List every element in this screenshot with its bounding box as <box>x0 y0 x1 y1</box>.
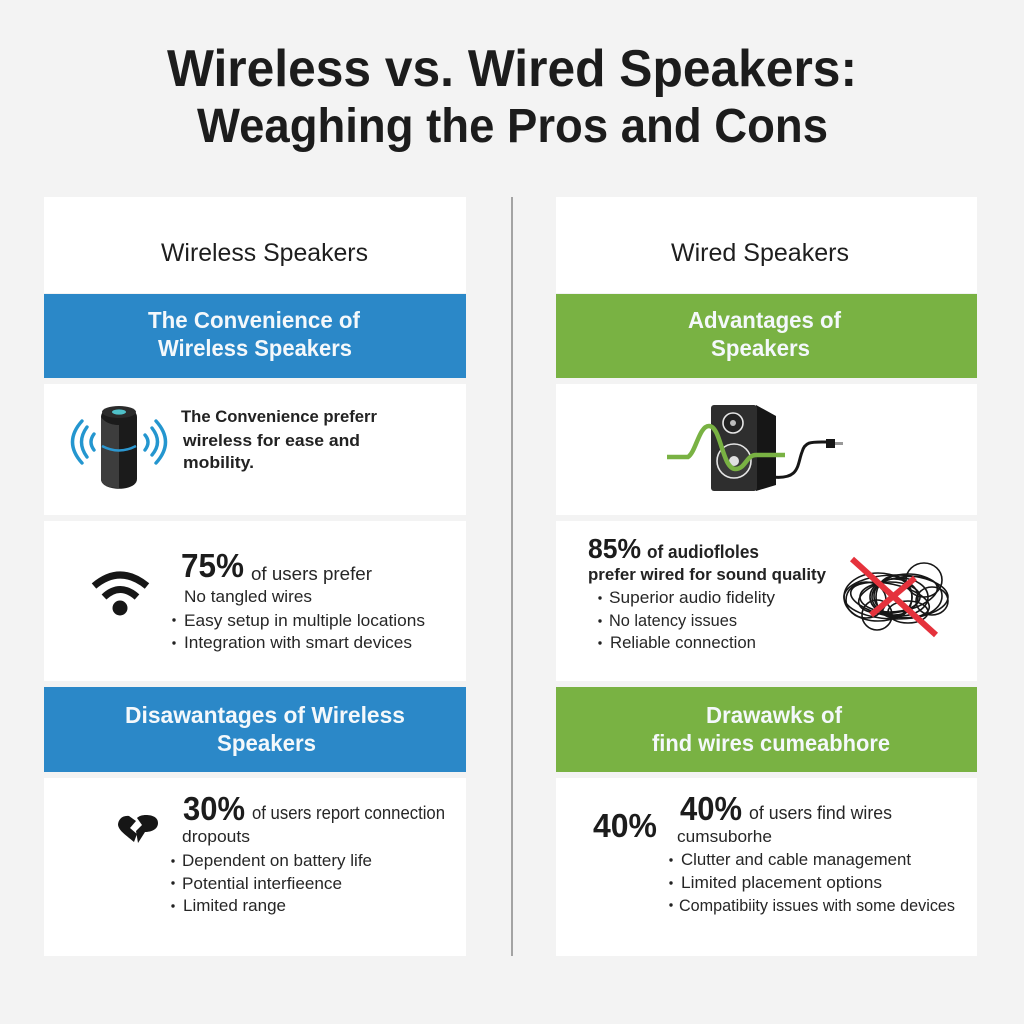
title <box>167 40 857 153</box>
stat: 75% of users prefer: of users prefer <box>251 564 372 584</box>
stat: 30% report connection dropouts: of users report connection <box>252 803 445 823</box>
stat: 85% of audiofloles prefer wired: of audiofloles <box>647 542 759 562</box>
stat: 40% of users find wires cumbersome: 40% <box>680 790 742 827</box>
bullet list: wireless advantages <box>172 587 425 652</box>
banner: drawbacks of wires: Drawawks of <box>706 702 842 728</box>
wireless column heading: Wireless Speakers <box>161 239 368 267</box>
bullet list: wired disadvantages: Clutter and cable management <box>681 850 911 869</box>
banner: disadvantages of wireless speakers: Speakers <box>217 730 316 756</box>
banner: disadvantages of wireless speakers: Disawantages of Wireless <box>125 702 405 728</box>
bullet list: wired disadvantages: Compatibiity issues with some devices <box>679 896 955 915</box>
bullet list: wired advantages: Superior audio fidelity <box>609 588 776 607</box>
title: Weaghing the Pros and Cons <box>197 100 828 153</box>
stat: 30% report connection dropouts: 30% <box>183 790 245 827</box>
title: Wireless vs. Wired Speakers: <box>167 40 857 98</box>
stat: 30% report connection dropouts <box>182 790 445 846</box>
banner: advantages of speakers: Speakers <box>711 335 810 361</box>
stat: 30% report connection dropouts: dropouts <box>182 827 250 846</box>
panel: wireless speakers column <box>44 197 466 956</box>
banner: disadvantages of wireless speakers <box>44 687 466 772</box>
bullet list: wireless disadvantages <box>171 851 372 915</box>
bullet list: wired advantages <box>598 588 776 652</box>
bullet list: wired disadvantages: Limited placement options <box>681 873 882 892</box>
banner: the convenience of wireless speakers <box>44 294 466 378</box>
icon: bookshelf speaker with cable and sound wave <box>667 405 843 491</box>
stat: 85% of audiofloles prefer wired: prefer wired for sound quality <box>588 565 827 584</box>
card: wireless disadvantages <box>44 778 466 956</box>
bullet list: wired advantages: Reliable connection <box>610 633 756 652</box>
card: wired disadvantages <box>556 778 977 956</box>
banner: the convenience of wireless speakers: Wireless Speakers <box>158 335 352 361</box>
large stat: 40%: 40% <box>593 807 657 844</box>
card: convenience summary <box>44 384 466 515</box>
banner: drawbacks of wires: find wires cumeabhore <box>652 730 890 756</box>
text: convenience statement: wireless for ease and <box>182 431 360 450</box>
card: wired speaker illustration <box>556 384 977 515</box>
icon: broken heart <box>118 815 158 843</box>
bullet list: wireless advantages: Easy setup in multiple locations <box>184 611 425 630</box>
bullet list: wireless disadvantages: Potential interfieence <box>182 874 342 893</box>
icon: smart speaker with sound waves <box>72 406 166 489</box>
stat: 75% of users prefer <box>181 547 372 584</box>
stat: 40% of users find wires cumbersome: cumsuborhe <box>677 827 772 846</box>
stat: 85% of audiofloles prefer wired <box>588 533 827 584</box>
card: 75% users prefer wireless <box>44 521 466 681</box>
stat: 75% of users prefer: 75% <box>181 547 244 584</box>
icon: tangled cable crossed out <box>844 559 948 635</box>
text: convenience statement: mobility. <box>183 453 254 472</box>
icon: wifi <box>94 575 147 616</box>
bullet list: wired advantages: No latency issues <box>609 611 737 630</box>
text: convenience statement: The Convenience preferr <box>181 407 377 426</box>
text: convenience statement <box>181 407 377 472</box>
card: 85% audiophiles prefer wired <box>556 521 977 681</box>
bullet list: wireless disadvantages: Limited range <box>183 896 286 915</box>
banner: advantages of speakers: Advantages of <box>688 307 841 333</box>
bullet list: wireless advantages: No tangled wires <box>184 587 312 606</box>
panel: wired speakers column <box>556 197 977 956</box>
banner: drawbacks of wires <box>556 687 977 772</box>
banner: the convenience of wireless speakers: The Convenience of <box>148 307 360 333</box>
wired column heading: Wired Speakers <box>671 239 849 267</box>
bullet list: wired disadvantages <box>669 850 955 915</box>
wired column heading <box>556 197 977 293</box>
stat: 40% of users find wires cumbersome <box>677 790 892 846</box>
banner: advantages of speakers <box>556 294 977 378</box>
bullet list: wireless disadvantages: Dependent on battery life <box>182 851 372 870</box>
stat: 40% of users find wires cumbersome: of users find wires <box>749 803 892 823</box>
bullet list: wireless advantages: Integration with smart devices <box>184 633 412 652</box>
wireless column heading <box>44 197 466 293</box>
stat: 85% of audiofloles prefer wired: 85% <box>588 533 641 564</box>
